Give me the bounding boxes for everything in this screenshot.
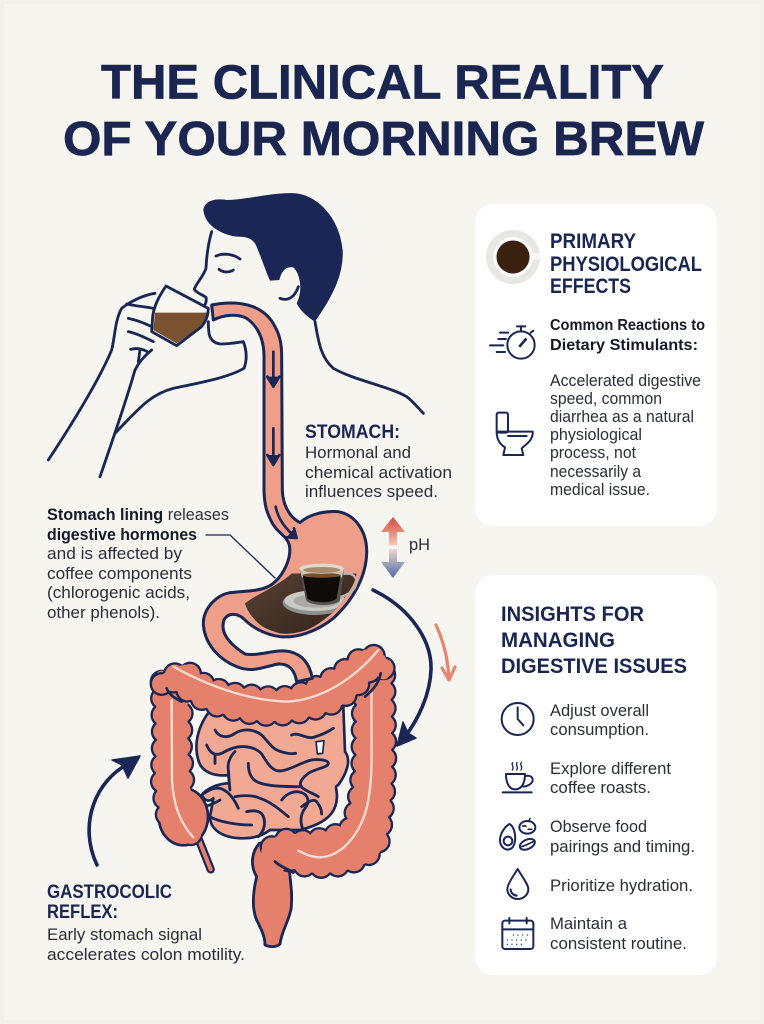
infographic canvas bbox=[46, 64, 717, 975]
panel heading: EFFECTS bbox=[550, 275, 631, 298]
panel: insights for managing digestive issues bbox=[475, 575, 717, 975]
esophagus arrows bbox=[267, 352, 297, 538]
panel heading: PHYSIOLOGICAL bbox=[550, 253, 702, 276]
descending colon and sigmoid bbox=[267, 675, 385, 873]
text: adjust consumption: consumption. bbox=[550, 720, 649, 739]
title bbox=[63, 56, 705, 166]
icon: calendar bbox=[502, 918, 533, 949]
icon: steaming cup bbox=[503, 763, 533, 792]
text: stomach: STOMACH: bbox=[305, 422, 400, 443]
subheading: Common Reactions to bbox=[550, 317, 705, 334]
esophagus, stomach and duodenum bbox=[203, 303, 367, 682]
transverse colon bbox=[162, 650, 384, 715]
text: food pairings: Observe food bbox=[550, 817, 647, 836]
panel heading: INSIGHTS FOR bbox=[501, 602, 644, 626]
icon: coffee cup from above bbox=[486, 230, 541, 284]
body text: medical issue. bbox=[550, 480, 650, 499]
rectum bbox=[252, 833, 297, 947]
body text: Accelerated digestive bbox=[550, 371, 701, 390]
icon: water drop bbox=[507, 869, 528, 899]
ascending colon and cecum bbox=[157, 677, 209, 847]
body text: necessarily a bbox=[550, 462, 641, 481]
text: stomach lining note: coffee components bbox=[47, 564, 192, 583]
text: hydration: Prioritize hydration. bbox=[550, 876, 693, 895]
body text bbox=[550, 371, 701, 499]
espresso cup inside stomach bbox=[299, 564, 356, 605]
text: stomach lining note bbox=[47, 505, 229, 622]
text: stomach: Hormonal and bbox=[305, 443, 411, 462]
text: explore roasts: coffee roasts. bbox=[550, 778, 651, 797]
text: stomach: chemical activation bbox=[305, 463, 452, 482]
body text: diarrhea as a natural bbox=[550, 407, 694, 426]
subheading: Dietary Stimulants: bbox=[550, 337, 698, 354]
panel heading: MANAGING bbox=[501, 628, 615, 652]
text: stomach lining note: digestive hormones bbox=[47, 525, 197, 544]
illustration: digestive tract bbox=[157, 303, 385, 947]
icon: avocado, fruit and bean bbox=[500, 819, 537, 852]
appendix bbox=[198, 838, 211, 869]
text: adjust consumption: Adjust overall bbox=[550, 701, 649, 720]
text: stomach bbox=[305, 422, 452, 501]
icon: clock bbox=[502, 703, 534, 735]
arrow: motility direction bbox=[436, 625, 455, 680]
table and saucer inside stomach bbox=[245, 573, 357, 634]
pH indicator bbox=[381, 517, 430, 578]
text: explore roasts bbox=[550, 759, 671, 797]
text: stomach lining note: Stomach lining releases bbox=[47, 505, 229, 524]
panel: primary physiological effects bbox=[475, 204, 717, 526]
icon: toilet bbox=[497, 413, 533, 455]
text: food pairings bbox=[550, 817, 695, 856]
text: stomach lining note: (chlorogenic acids, bbox=[47, 583, 190, 602]
text: gastrocolic reflex: Early stomach signal bbox=[47, 925, 202, 944]
text: stomach: influences speed. bbox=[305, 482, 438, 501]
title: OF YOUR MORNING BREW bbox=[63, 113, 705, 166]
arrow: gastrocolic reflex bbox=[89, 756, 140, 865]
text: food pairings: pairings and timing. bbox=[550, 837, 695, 856]
text: stomach lining note: and is affected by bbox=[47, 544, 182, 563]
arrow: stomach to colon bbox=[373, 590, 431, 746]
leader line to stomach lining bbox=[206, 535, 275, 578]
text: stomach lining note: other phenols). bbox=[47, 603, 160, 622]
body text: speed, common bbox=[550, 389, 662, 408]
panel heading bbox=[501, 602, 687, 678]
illustration: man drinking coffee bbox=[48, 193, 423, 477]
text: gastrocolic reflex bbox=[47, 882, 245, 964]
small intestine bbox=[196, 707, 348, 838]
panel heading bbox=[550, 230, 702, 298]
face, arm and shoulder outlines bbox=[48, 232, 423, 477]
text: consistent routine bbox=[550, 914, 687, 953]
text: gastrocolic reflex: accelerates colon motility. bbox=[47, 945, 245, 964]
text: consistent routine: consistent routine. bbox=[550, 934, 687, 953]
text: consistent routine: Maintain a bbox=[550, 914, 628, 933]
icon: stopwatch bbox=[490, 326, 535, 359]
body text: process, not bbox=[550, 443, 636, 462]
title: THE CLINICAL REALITY bbox=[101, 56, 664, 110]
text: adjust consumption bbox=[550, 701, 649, 739]
panel heading: DIGESTIVE ISSUES bbox=[501, 654, 687, 678]
text: explore roasts: Explore different bbox=[550, 759, 671, 778]
hair bbox=[203, 193, 343, 322]
text: gastrocolic reflex: GASTROCOLIC bbox=[47, 882, 172, 903]
text: gastrocolic reflex: REFLEX: bbox=[47, 902, 118, 923]
panel heading: PRIMARY bbox=[550, 230, 636, 253]
coffee glass bbox=[152, 286, 208, 346]
pH indicator: pH bbox=[409, 535, 430, 554]
subheading bbox=[550, 317, 705, 354]
body text: physiological bbox=[550, 425, 642, 444]
